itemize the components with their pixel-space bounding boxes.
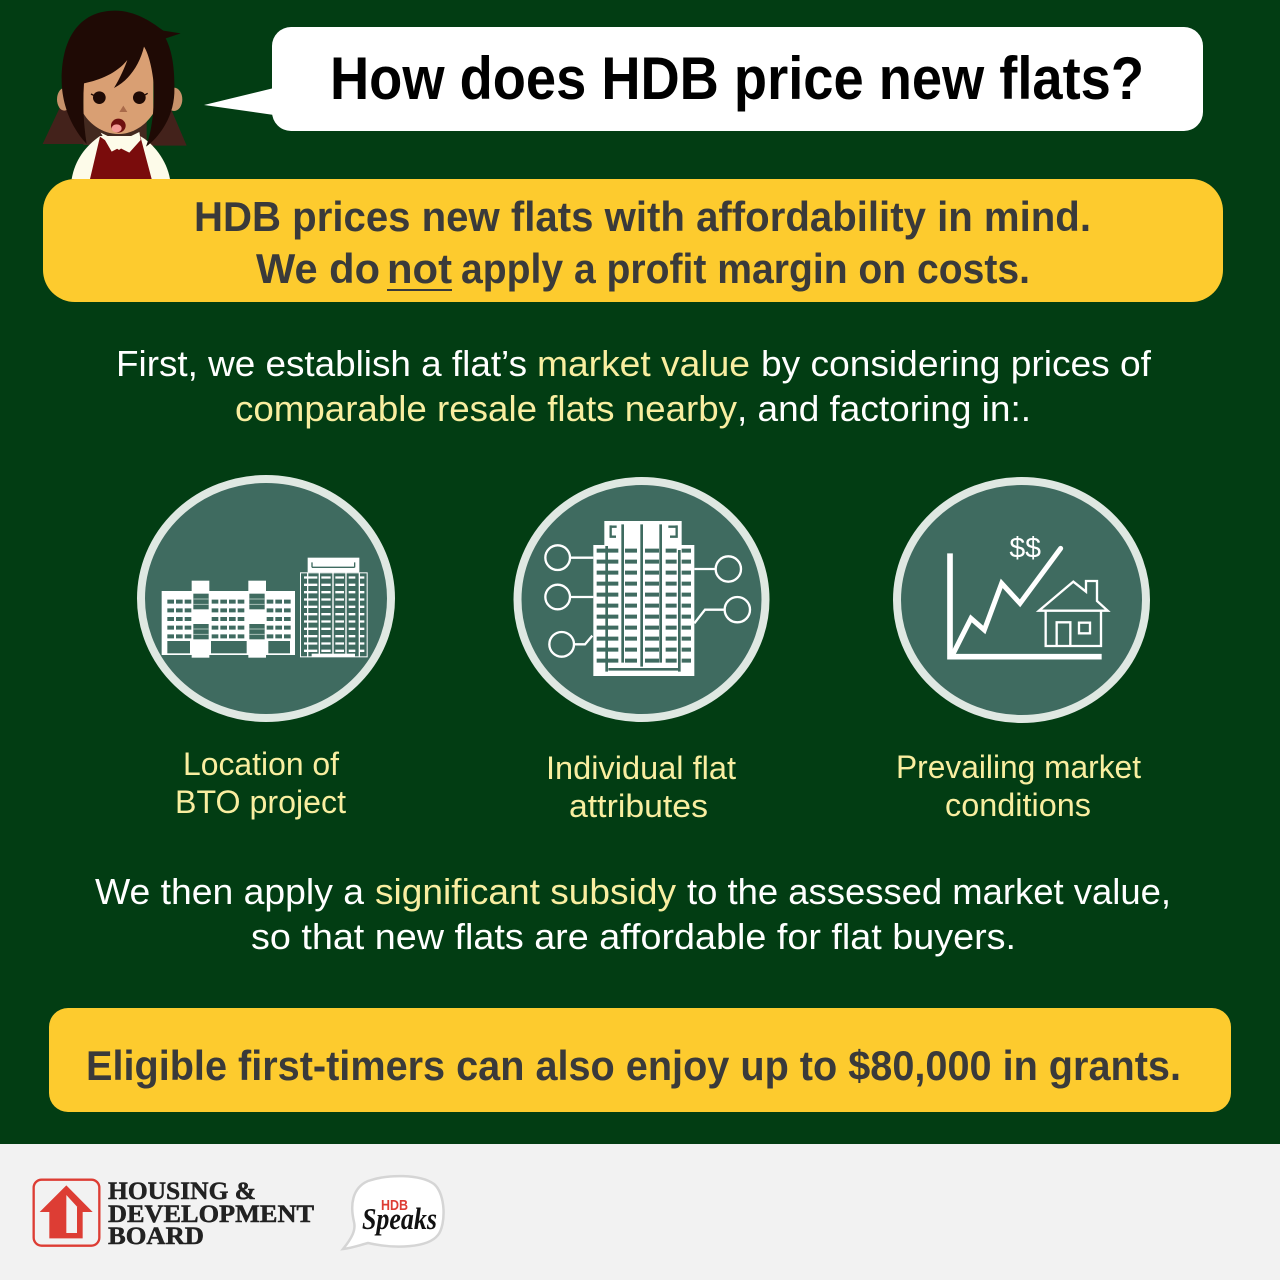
text block: market value: First, we establish a flat’s xyxy=(116,343,527,384)
text block: subsidy: to the assessed market value, xyxy=(687,871,1171,912)
text block: subsidy: We then apply a xyxy=(95,871,365,912)
caption: market conditions: Prevailing market xyxy=(896,749,1141,785)
text block: market value: comparable resale flats nearby xyxy=(235,388,737,429)
icon: location, two buildings xyxy=(141,479,391,718)
icon: market conditions, rising chart and house xyxy=(897,481,1146,719)
icon: market conditions, rising chart and house: $$ xyxy=(1009,532,1041,564)
text block: subsidy: significant subsidy xyxy=(375,871,676,912)
callout: grants xyxy=(49,1008,1231,1112)
speech bubble with title xyxy=(204,27,1203,131)
callout: no profit margin: apply a profit margin on costs. xyxy=(461,245,1030,292)
text block: market value: by considering prices of xyxy=(761,343,1152,384)
logo: HDB Speaks bubble xyxy=(343,1176,444,1249)
caption: flat attributes: attributes xyxy=(569,788,708,824)
text block: market value xyxy=(116,343,1152,429)
icon: flat attributes, tower with nodes xyxy=(518,481,766,718)
node connectors xyxy=(545,545,750,657)
caption: location: BTO project xyxy=(175,784,346,820)
caption: flat attributes xyxy=(546,750,736,824)
text block: subsidy xyxy=(95,871,1171,957)
logo: Housing and Development Board xyxy=(34,1178,314,1250)
logo: HDB Speaks bubble: Speaks xyxy=(362,1201,437,1236)
callout: no profit margin xyxy=(43,179,1223,302)
logo: Housing and Development Board: HOUSING & xyxy=(108,1178,256,1205)
caption: flat attributes: Individual flat xyxy=(546,750,736,786)
tower block xyxy=(300,558,367,657)
callout: no profit margin: HDB prices new flats with affordability in mind. xyxy=(194,193,1091,240)
logo: Housing and Development Board: BOARD xyxy=(108,1223,204,1250)
callout: no profit margin: We do xyxy=(256,245,380,292)
footer band xyxy=(0,1144,1280,1280)
caption: location: Location of xyxy=(183,746,339,782)
title: How does HDB price new flats? xyxy=(330,45,1144,112)
caption: location xyxy=(175,746,346,820)
house xyxy=(1039,581,1108,646)
character: woman with open mouth xyxy=(43,11,187,179)
callout: grants: Eligible first-timers can also enjoy up to $80,000 in grants. xyxy=(86,1042,1181,1089)
caption: market conditions xyxy=(896,749,1141,823)
caption: market conditions: conditions xyxy=(945,787,1091,823)
text block: market value: market value xyxy=(537,343,750,384)
callout: no profit margin: not xyxy=(387,245,452,292)
low-rise block xyxy=(162,581,295,658)
tower xyxy=(593,521,694,676)
logo: Housing and Development Board: DEVELOPMENT xyxy=(108,1201,314,1228)
icon: house arrow xyxy=(34,1180,99,1246)
text block: market value: , and factoring in:. xyxy=(737,388,1031,429)
text block: subsidy: so that new flats are affordable for flat buyers. xyxy=(251,916,1016,957)
logo: HDB Speaks bubble: HDB xyxy=(381,1197,408,1214)
